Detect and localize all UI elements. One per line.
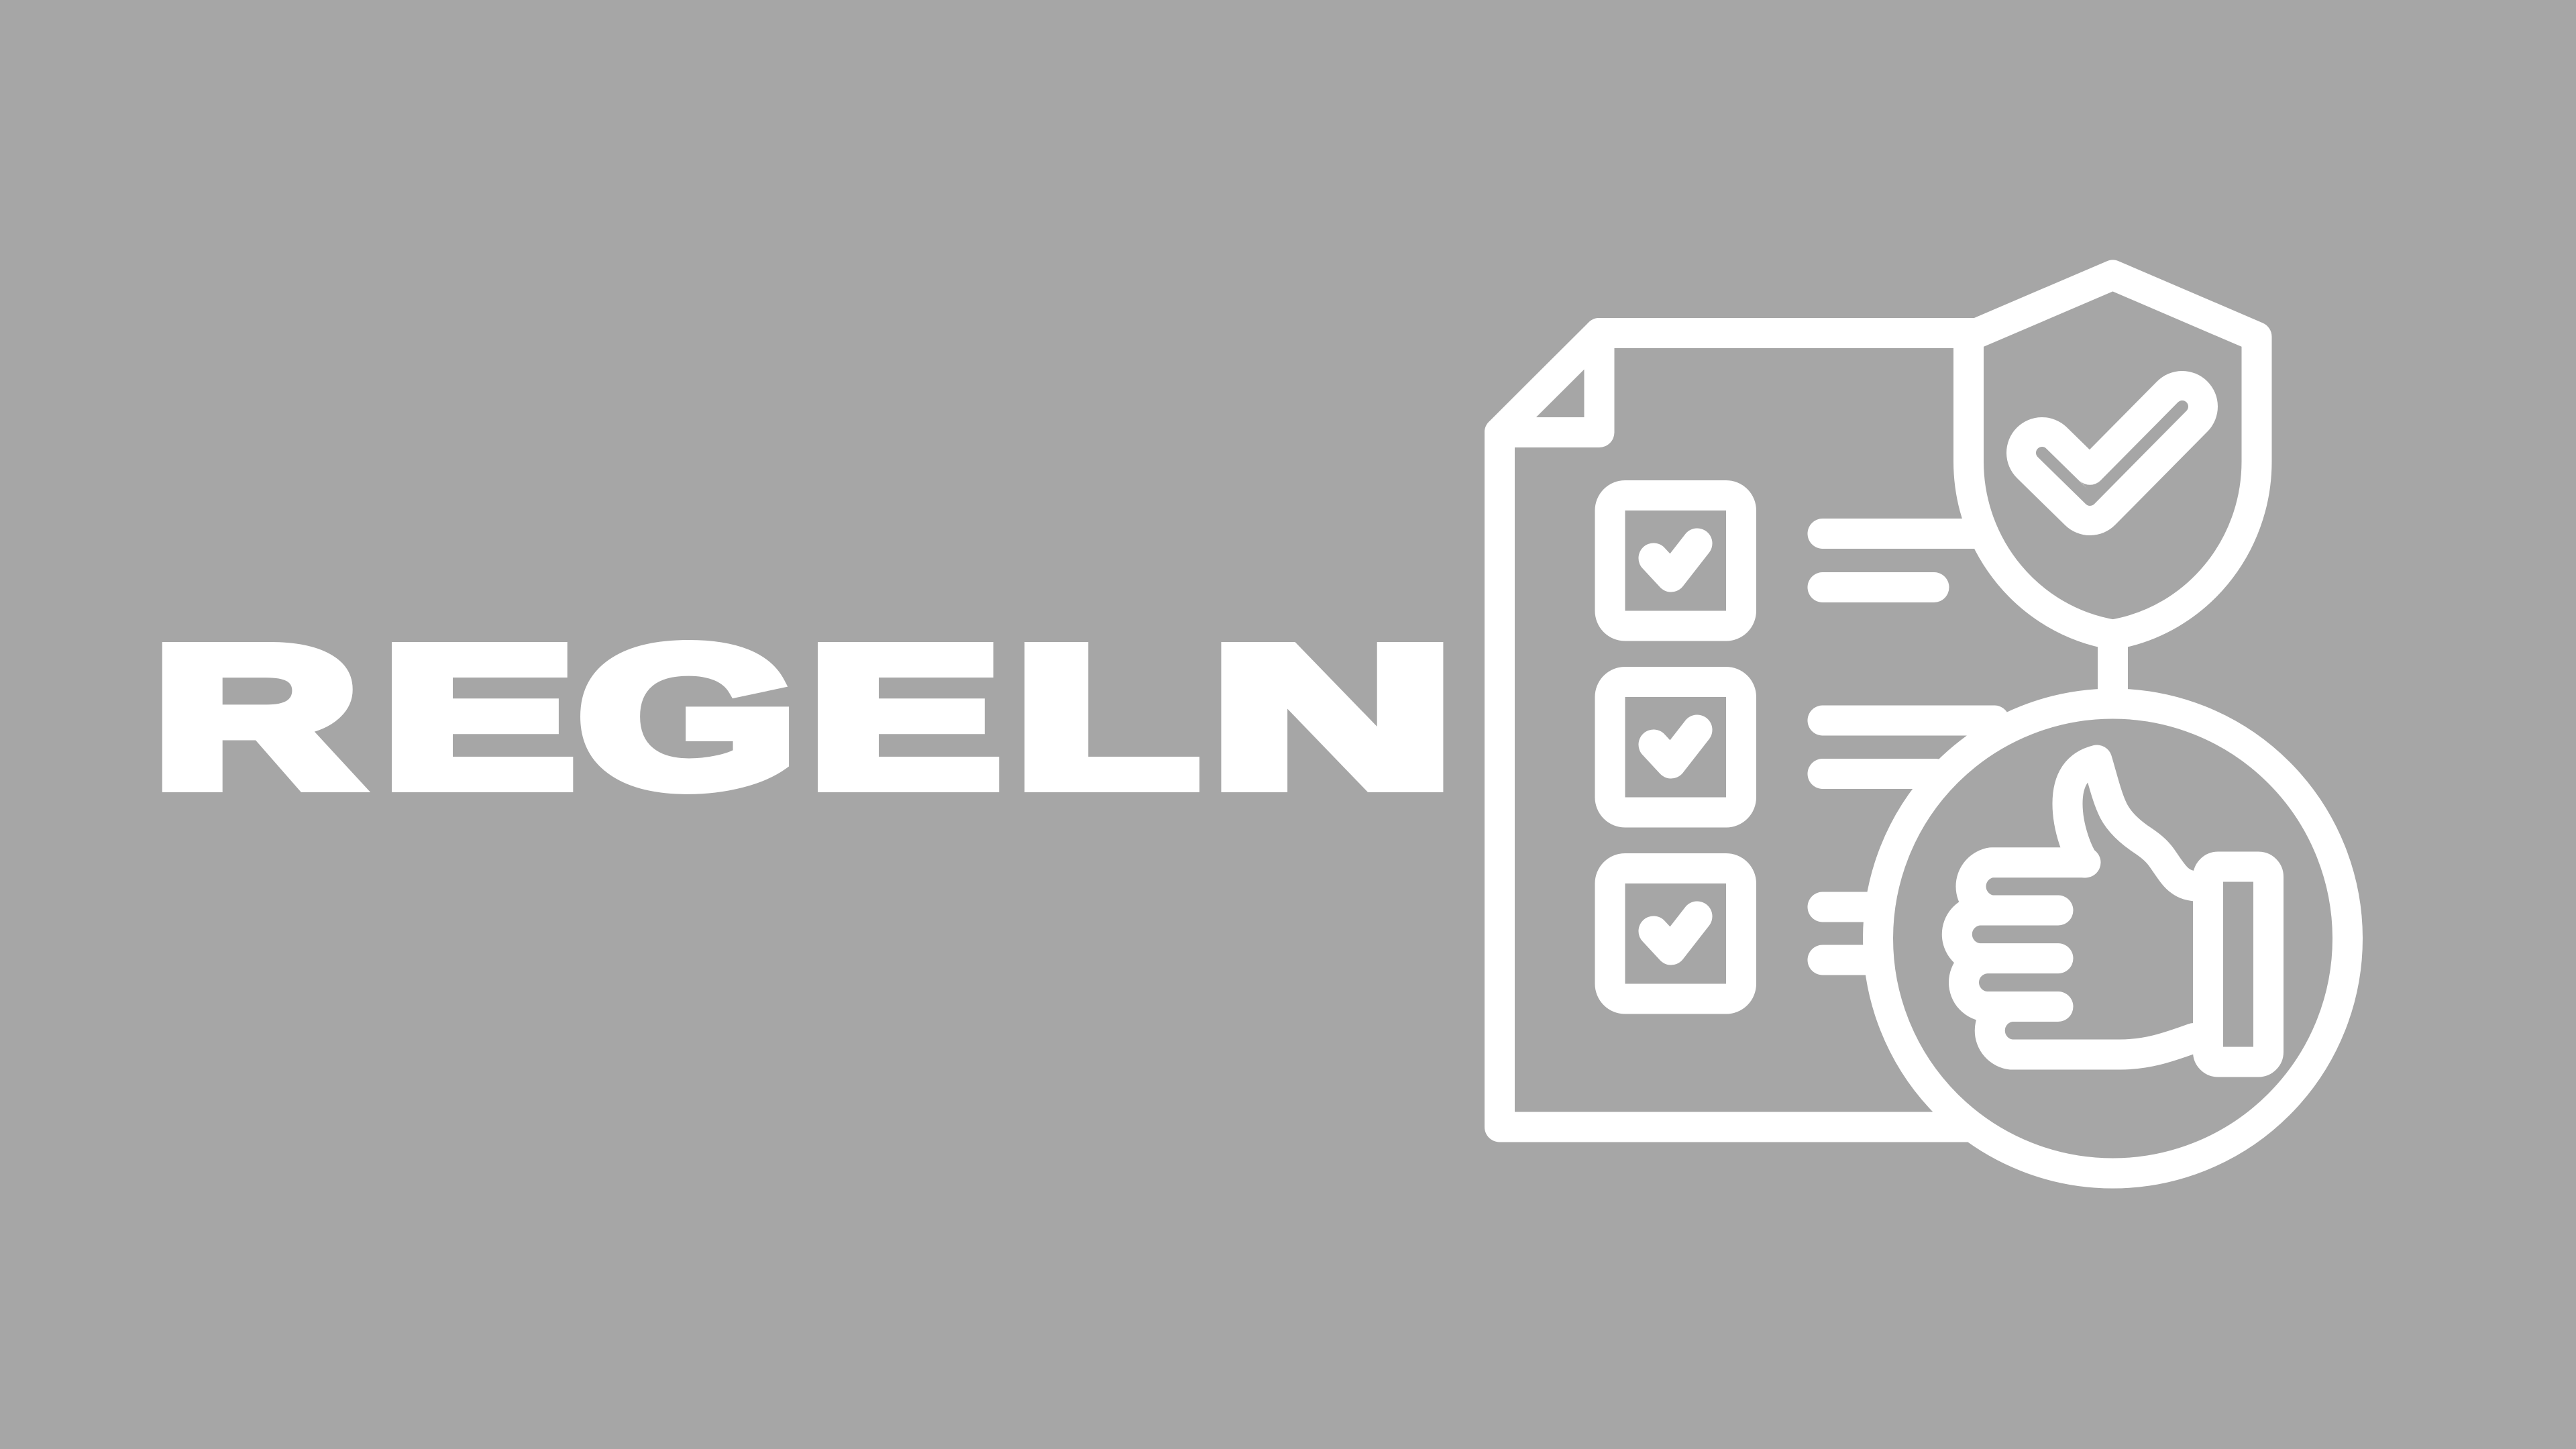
icon: rules document with shield and thumbs up bbox=[1500, 275, 2348, 1173]
title: REGELN: E bbox=[382, 606, 575, 828]
title: REGELN: E bbox=[808, 606, 1001, 828]
thumbs up cuff bbox=[2208, 867, 2269, 1062]
title: REGELN: G bbox=[578, 605, 797, 828]
text lines row 1 bbox=[1823, 534, 1979, 588]
circle badge bbox=[1878, 704, 2348, 1173]
connector between shield and circle bbox=[2098, 641, 2128, 701]
checkbox row 3 bbox=[1610, 868, 1741, 999]
title: REGELN bbox=[153, 605, 1454, 828]
checkbox row 2 bbox=[1610, 682, 1741, 812]
document outline with folded corner bbox=[1500, 333, 1976, 1127]
shield check outline bbox=[2042, 407, 2182, 500]
title: REGELN: R bbox=[153, 605, 359, 828]
title: REGELN: N bbox=[1210, 605, 1454, 828]
thumbs up hand bbox=[1957, 863, 2194, 1055]
icon: thumbs up bbox=[1957, 760, 2269, 1062]
text lines row 2 bbox=[1823, 720, 1994, 774]
checkbox row 1 bbox=[1610, 495, 1741, 626]
title: REGELN: L bbox=[1014, 606, 1199, 828]
icon: shield bbox=[1968, 275, 2257, 635]
text lines row 3 bbox=[1823, 907, 1878, 960]
thumb bbox=[2068, 760, 2195, 886]
